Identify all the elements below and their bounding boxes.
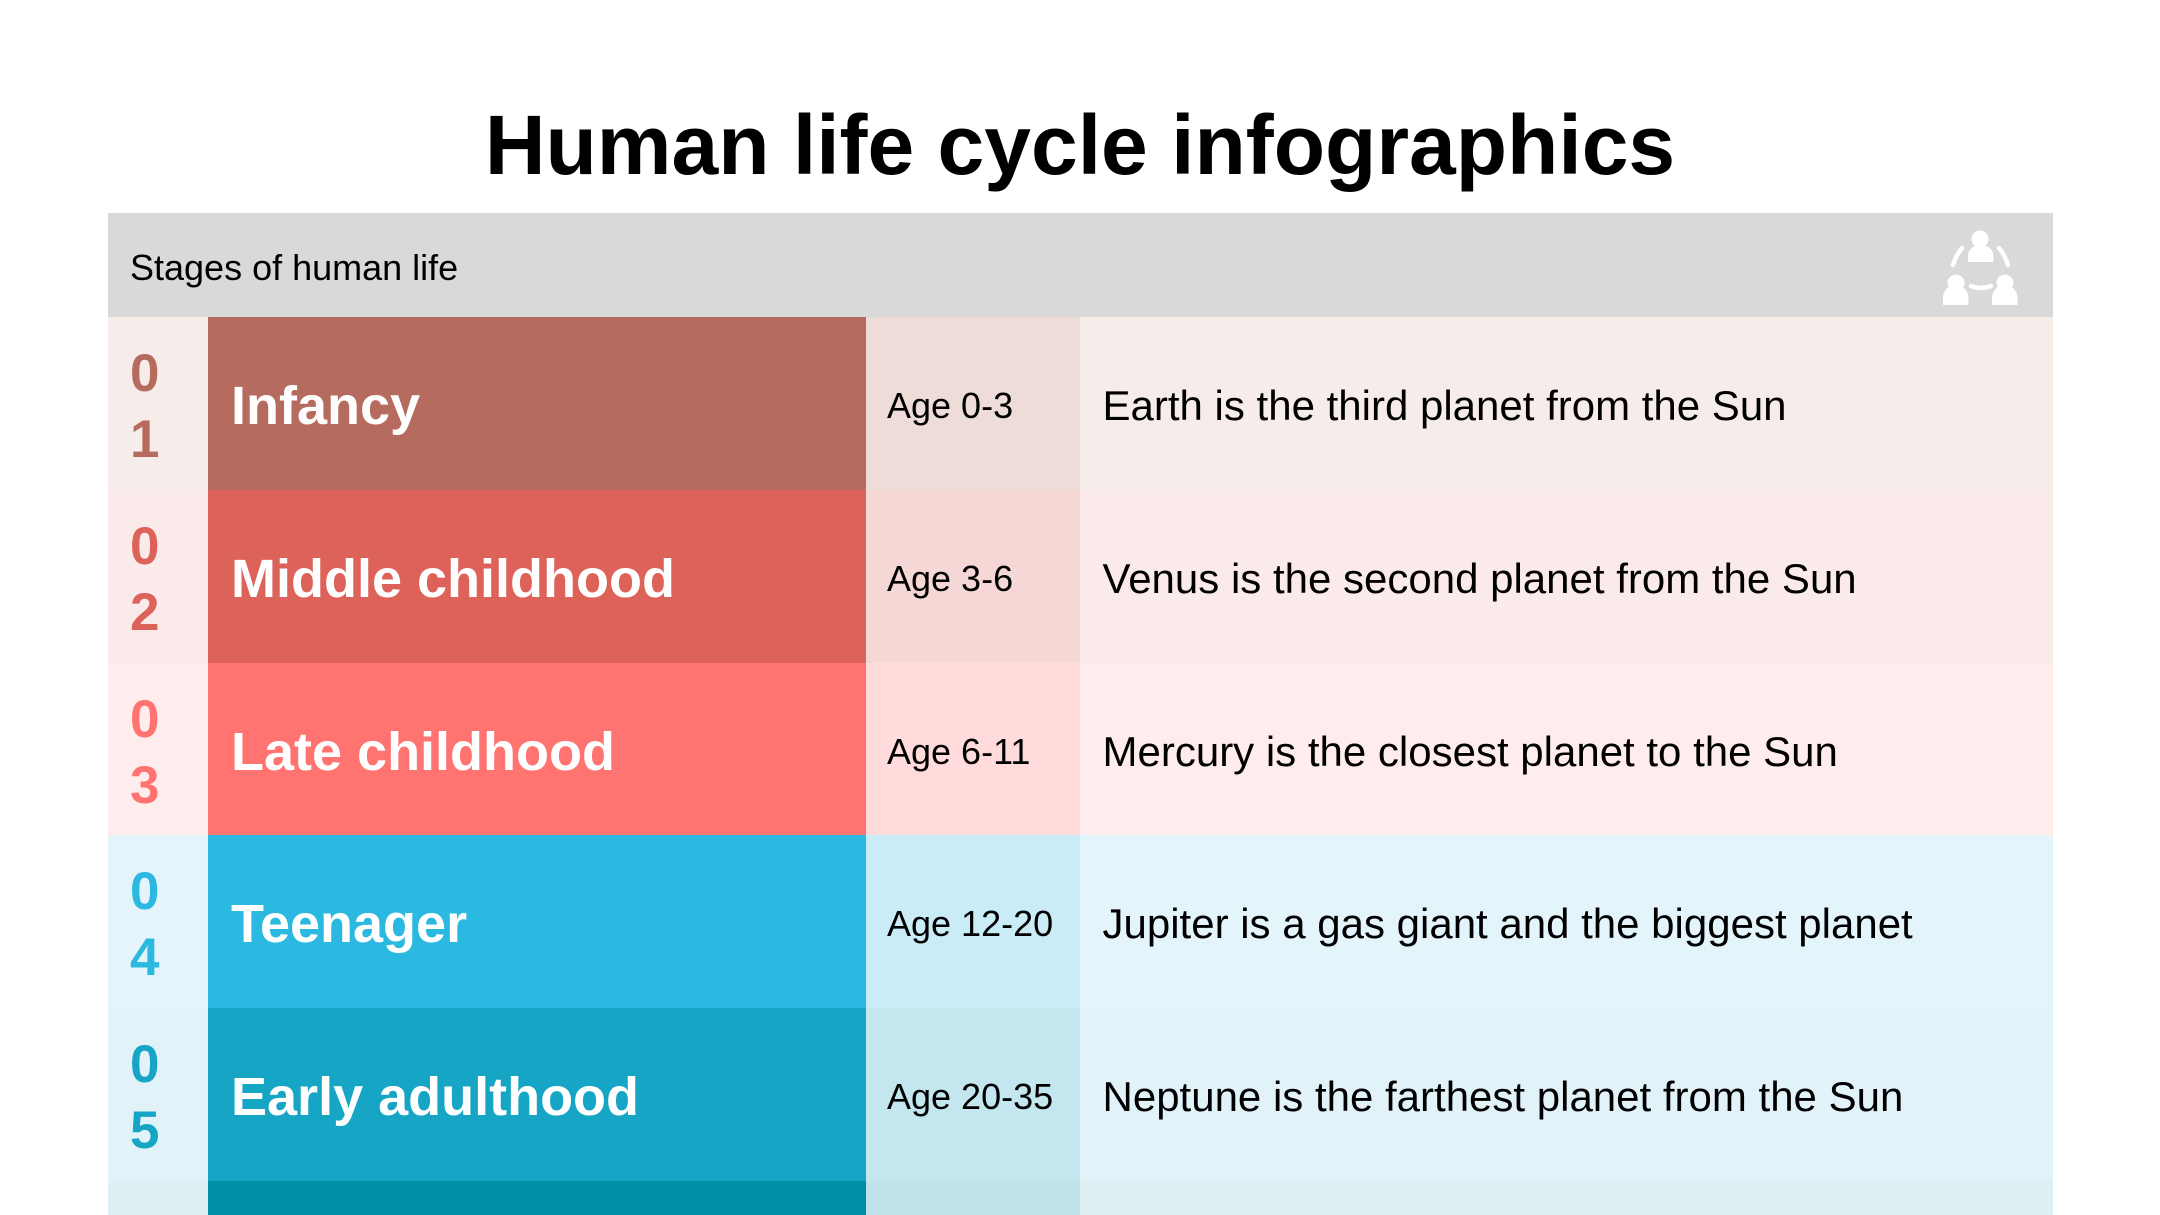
- age range: Age 20-35: [887, 1076, 1053, 1117]
- stage name: Middle childhood: [231, 549, 675, 609]
- stage name: [208, 663, 866, 836]
- row number: [108, 1008, 208, 1181]
- stage name: Infancy: [231, 376, 420, 436]
- row 5: Early adulthood: [108, 1008, 2053, 1181]
- age range: Age 12-20: [887, 903, 1053, 944]
- description: Jupiter is a gas giant and the biggest planet: [1102, 900, 1913, 947]
- description: Mercury is the closest planet to the Sun: [1102, 728, 1838, 775]
- age cell: [866, 1181, 1080, 1215]
- panel: table header: [108, 213, 2053, 317]
- row number: 02: [130, 517, 159, 642]
- row 4: Teenager: [108, 835, 2053, 1008]
- row 3: Late childhood: [108, 663, 2053, 835]
- stage name: [208, 317, 866, 490]
- description: Venus is the second planet from the Sun: [1102, 555, 1857, 602]
- age range: [866, 663, 1080, 836]
- row number: 01: [130, 344, 159, 469]
- row number: 05: [130, 1035, 159, 1160]
- row 6: cropped at page edge: [108, 1181, 2053, 1215]
- description: Earth is the third planet from the Sun: [1102, 382, 1787, 429]
- row number: [108, 317, 208, 490]
- row number: [108, 835, 208, 1008]
- header label: Stages of human life: [130, 247, 458, 288]
- description: [1080, 490, 2053, 663]
- stage name: Teenager: [231, 894, 467, 954]
- stage name: Early adulthood: [231, 1067, 639, 1127]
- stage name: [208, 490, 866, 663]
- age range: Age 6-11: [887, 731, 1030, 772]
- title: Human life cycle infographics: [485, 98, 1675, 192]
- row number: [108, 663, 208, 836]
- age range: [866, 1008, 1080, 1181]
- description: [1080, 317, 2053, 490]
- row 1: Infancy: [108, 317, 2053, 490]
- row number cell: [108, 1181, 208, 1215]
- row number: 03: [130, 690, 159, 815]
- age range: [866, 317, 1080, 490]
- description cell: [1080, 1181, 2053, 1215]
- description: [1080, 835, 2053, 1008]
- age range: [866, 835, 1080, 1008]
- stage name cell: [208, 1181, 866, 1215]
- stage name: [208, 1008, 866, 1181]
- age range: Age 3-6: [887, 558, 1013, 599]
- row number: [108, 490, 208, 663]
- icon: group of people: [1943, 230, 2018, 305]
- stage name: [208, 835, 866, 1008]
- description: Neptune is the farthest planet from the Sun: [1102, 1073, 1903, 1120]
- row number: 04: [130, 862, 159, 987]
- age range: [866, 490, 1080, 663]
- description: [1080, 663, 2053, 836]
- stage name: Late childhood: [231, 722, 615, 782]
- age range: Age 0-3: [887, 385, 1013, 426]
- row 2: Middle childhood: [108, 490, 2053, 663]
- description: [1080, 1008, 2053, 1181]
